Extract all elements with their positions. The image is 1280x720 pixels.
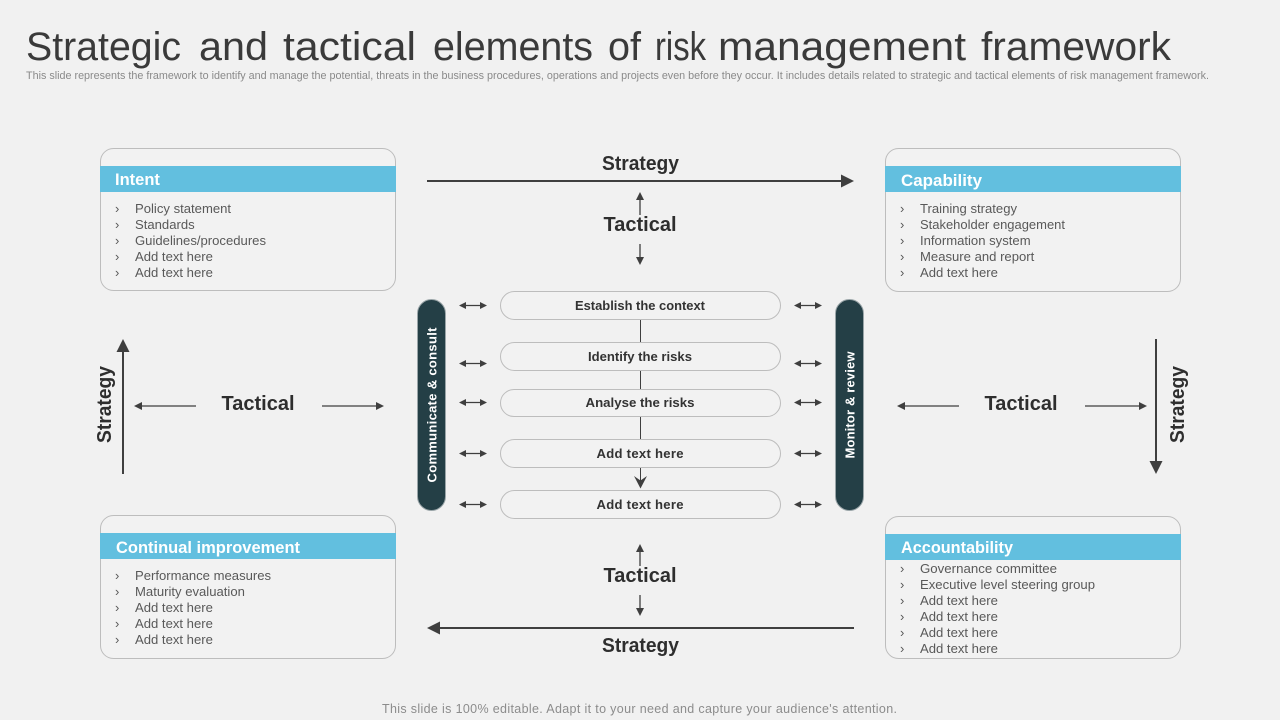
top tactical with arrows [604, 192, 676, 265]
panel: accountability: › [900, 625, 904, 640]
panel: capability: Training strategy [920, 201, 1017, 216]
panel: intent: › [115, 217, 119, 232]
panel: capability: › [900, 217, 904, 232]
title: Strategic [26, 25, 181, 69]
panel: intent: Add text here [135, 249, 213, 264]
panel: intent: Add text here [135, 265, 213, 280]
panel: intent: Intent [115, 171, 160, 189]
panel: capability: › [900, 201, 904, 216]
panel: intent [100, 148, 396, 290]
communicate and consult bar: Communicate & consult [424, 327, 440, 482]
process step: add text 2 [500, 490, 780, 518]
panel: capability: › [900, 265, 904, 280]
panel: continual improvement: Add text here [135, 616, 213, 631]
title: framework [981, 25, 1172, 69]
panel: intent: › [115, 233, 119, 248]
title: tactical [283, 25, 416, 69]
process step: establish the context: Establish the context [575, 298, 706, 313]
process step: analyse the risks: Analyse the risks [586, 395, 694, 410]
panel: intent: Policy statement [135, 201, 231, 216]
title: and [199, 25, 268, 69]
bottom tactical with arrows: Tactical [604, 565, 676, 587]
process step: add text 1: Add text here [596, 446, 684, 461]
left strategy arrow: Strategy [94, 365, 116, 443]
panel: accountability: Add text here [920, 625, 998, 640]
panel: continual improvement: Performance measures [135, 568, 272, 583]
left strategy arrow [94, 339, 130, 474]
panel: continual improvement: Add text here [135, 600, 213, 615]
panel: capability [885, 148, 1181, 292]
communicate and consult bar [418, 300, 446, 510]
panel: continual improvement: Add text here [135, 632, 213, 647]
panel: capability: Measure and report [920, 249, 1035, 264]
panel: continual improvement: › [115, 600, 119, 615]
panel: continual improvement: Maturity evaluation [135, 584, 245, 599]
panel: accountability: › [900, 641, 904, 656]
panel: accountability: Governance committee [920, 561, 1057, 576]
right tactical with arrows: Tactical [984, 393, 1058, 415]
top tactical with arrows: Tactical [604, 214, 676, 236]
left double arrows [459, 302, 487, 508]
panel: accountability: Executive level steering group [920, 577, 1095, 592]
panel: accountability: Add text here [920, 609, 998, 624]
panel: intent: Standards [135, 217, 195, 232]
panel: capability: Information system [920, 233, 1031, 248]
footer note: This slide is 100% editable. Adapt it to your need and capture your audience's attention. [382, 702, 897, 716]
process step: analyse the risks [500, 390, 780, 416]
panel: continual improvement: › [115, 568, 119, 583]
panel: accountability: Accountability [901, 539, 1014, 557]
panel: continual improvement: › [115, 616, 119, 631]
process step: establish the context [500, 292, 780, 320]
panel: continual improvement: › [115, 632, 119, 647]
process step: identify the risks: Identify the risks [588, 349, 692, 364]
panel: intent: › [115, 265, 119, 280]
bottom strategy arrow: Strategy [602, 635, 680, 657]
bottom strategy arrow [427, 622, 854, 657]
right tactical with arrows [897, 393, 1147, 415]
right strategy arrow [1150, 339, 1189, 474]
monitor and review bar: Monitor & review [842, 351, 858, 458]
process step: add text 2: Add text here [596, 497, 684, 512]
title: of [608, 25, 642, 69]
panel: continual improvement [100, 516, 396, 658]
title: risk [655, 25, 707, 69]
panel: accountability: Add text here [920, 641, 998, 656]
monitor and review bar [836, 300, 864, 510]
panel: accountability: Add text here [920, 593, 998, 608]
panel: capability: Capability [901, 172, 983, 190]
top strategy arrow: Strategy [602, 153, 680, 175]
right strategy arrow: Strategy [1167, 365, 1189, 443]
process connectors [634, 320, 647, 488]
panel: capability: › [900, 233, 904, 248]
panel: accountability: › [900, 577, 904, 592]
panel: continual improvement: Continual improvement [116, 539, 301, 557]
panel: accountability: › [900, 593, 904, 608]
panel: capability: Stakeholder engagement [920, 217, 1065, 232]
process step: identify the risks [500, 342, 780, 370]
title: management [718, 25, 966, 69]
panel: continual improvement: › [115, 584, 119, 599]
panel: capability: › [900, 249, 904, 264]
panel: intent: Guidelines/procedures [135, 233, 266, 248]
right double arrows [794, 302, 822, 508]
left tactical with arrows [134, 393, 384, 415]
panel: capability: Add text here [920, 265, 998, 280]
panel: accountability: › [900, 609, 904, 624]
top strategy arrow [427, 153, 854, 188]
title: elements [433, 25, 593, 69]
panel: accountability: › [900, 561, 904, 576]
title [26, 25, 1172, 69]
panel: intent: › [115, 201, 119, 216]
process step: add text 1 [500, 440, 780, 468]
bottom tactical with arrows [604, 544, 676, 616]
panel: intent: › [115, 249, 119, 264]
panel: accountability [885, 516, 1181, 658]
subtitle: This slide represents the framework to identify and manage the potential, threats in the business procedures, operations and projects even before they occur. It includes details related to strategic and tactical elements of risk management framework. [26, 70, 1209, 82]
left tactical with arrows: Tactical [222, 393, 294, 415]
